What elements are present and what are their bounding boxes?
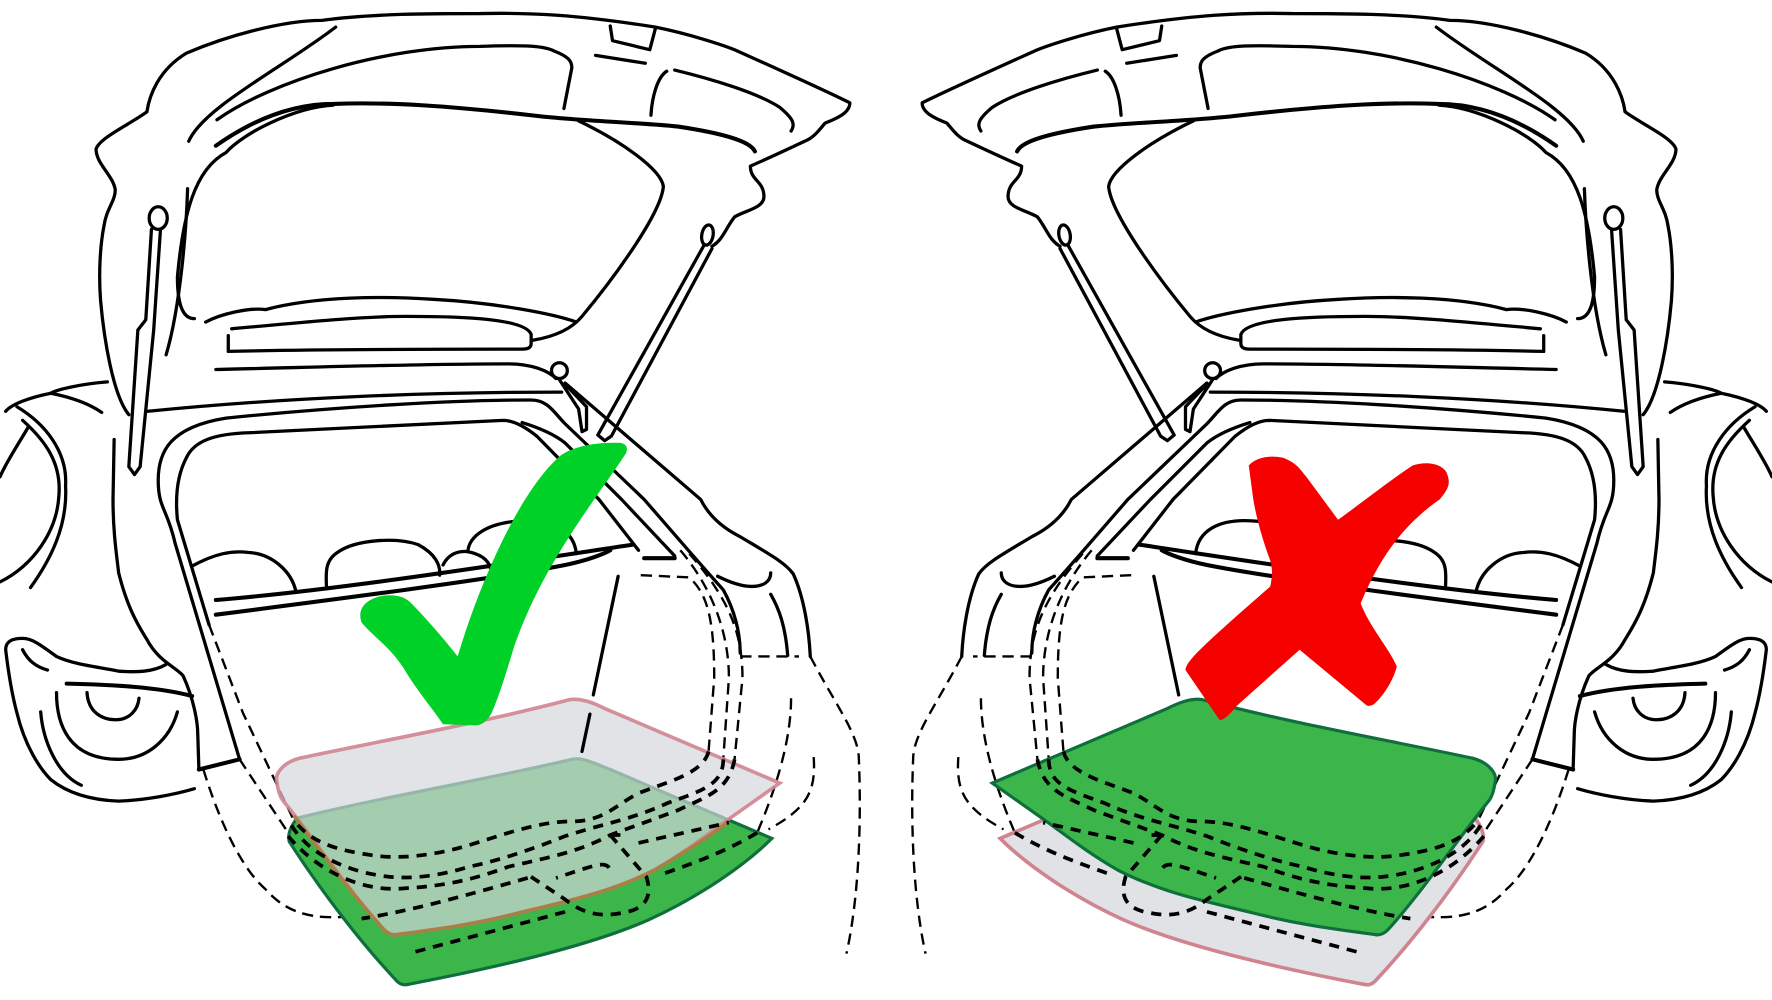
hidden structure dashes, right — [1015, 751, 1484, 953]
car line drawing, right — [912, 13, 1772, 954]
panel: correct placement car — [0, 13, 860, 985]
icon: red cross — [1185, 457, 1449, 720]
mat target area, grey, right — [1000, 759, 1483, 985]
mat edge over green — [294, 816, 729, 935]
mat, green, misplaced, right — [992, 699, 1496, 935]
mat outline, translucent, left — [276, 699, 780, 935]
car line drawing, left — [0, 13, 860, 954]
panel: incorrect placement car — [912, 13, 1772, 985]
mat target area, green, left — [289, 759, 772, 985]
hidden structure dashes, left — [288, 751, 757, 953]
icon: green check mark — [360, 443, 627, 725]
